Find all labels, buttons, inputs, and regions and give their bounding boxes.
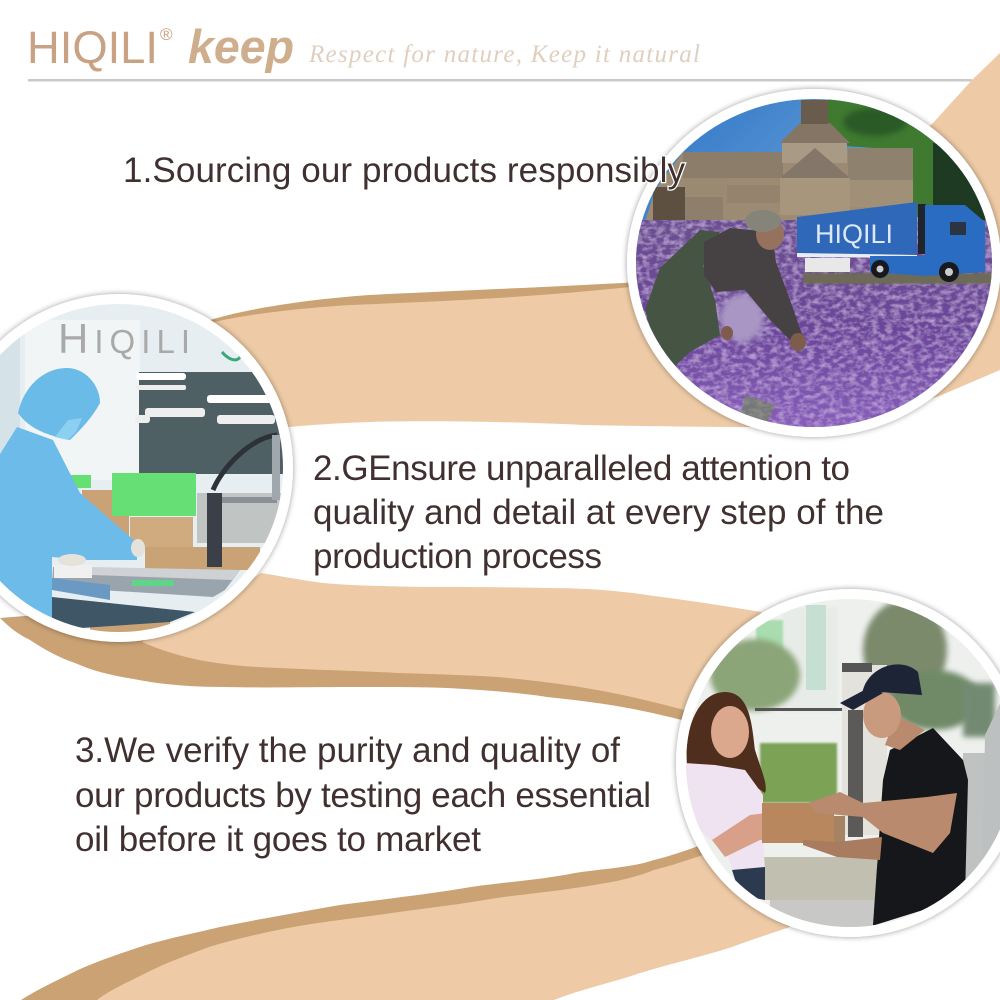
machine bbox=[197, 435, 282, 567]
step 3 text bbox=[75, 731, 651, 859]
boxes bbox=[82, 490, 129, 540]
background building bbox=[783, 607, 837, 713]
step 3 text: oil before it goes to market bbox=[75, 820, 481, 859]
green crates bbox=[112, 473, 196, 516]
trees bbox=[828, 100, 990, 238]
background trees bbox=[710, 639, 800, 711]
worker in blue suit bbox=[0, 368, 145, 623]
delivery man bbox=[803, 664, 968, 925]
conveyor table bbox=[52, 565, 240, 630]
tagline: Respect for nature, Keep it natural bbox=[308, 41, 700, 68]
van door bbox=[982, 704, 1000, 860]
ribbon: lower band bbox=[21, 845, 800, 1000]
step 2 text: 2.GEnsure unparalleled attention to bbox=[313, 449, 850, 488]
step 1 text: 1.Sourcing our products responsibly bbox=[123, 151, 686, 190]
truck: HIQILI bbox=[815, 219, 893, 249]
truck bbox=[797, 202, 985, 282]
lawn and ground bbox=[760, 743, 837, 803]
gate post bbox=[842, 665, 887, 835]
abbey bbox=[645, 100, 913, 222]
registered mark: ® bbox=[160, 25, 173, 44]
step 3 text: our products by testing each essential bbox=[75, 776, 651, 815]
dark board bbox=[139, 372, 284, 474]
step 2 text: production process bbox=[313, 537, 602, 576]
step 2 text: quality and detail at every step of the bbox=[313, 493, 884, 532]
wall logo: HIQILI bbox=[58, 315, 190, 362]
lavender field bbox=[630, 220, 1000, 435]
step 3 text: 3.We verify the purity and quality of bbox=[75, 731, 620, 770]
ribbon: middle band bbox=[0, 573, 780, 720]
harvesting man bbox=[645, 210, 806, 366]
woman bbox=[686, 692, 766, 900]
photo 3: parcel delivery bbox=[676, 589, 1000, 937]
keep wordmark: keep bbox=[188, 20, 294, 73]
parcel bbox=[762, 803, 845, 843]
step 2 text bbox=[313, 449, 884, 576]
photo 2: cleanroom production bbox=[0, 294, 293, 642]
ribbon: upper band bbox=[204, 53, 1000, 428]
header bbox=[27, 20, 700, 73]
photo 1: lavender harvest bbox=[627, 89, 1000, 437]
brand logo text: HIQILI bbox=[27, 22, 158, 73]
